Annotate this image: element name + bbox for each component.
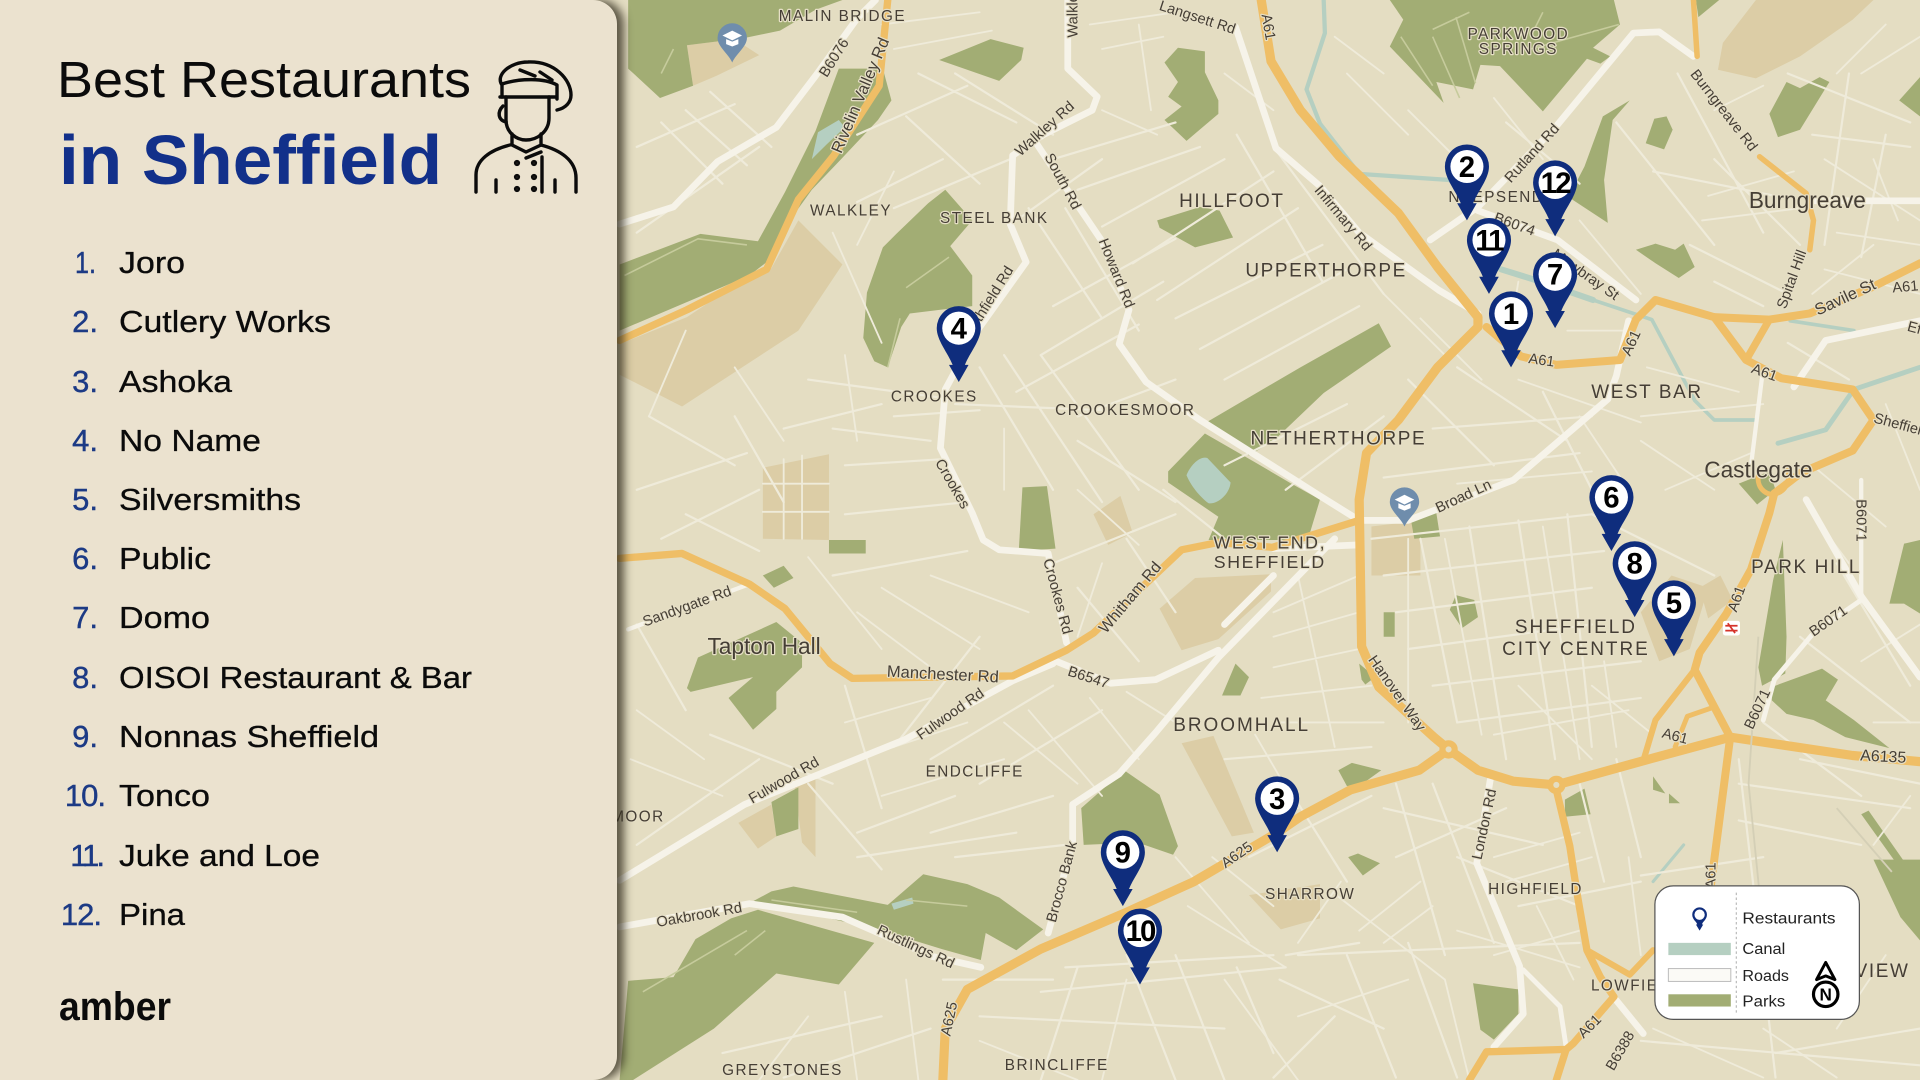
restaurant list: 2. bbox=[72, 304, 98, 339]
restaurant list: No Name bbox=[119, 423, 261, 458]
road labels: Broad Ln bbox=[1433, 477, 1494, 517]
pin 3: 3 bbox=[1269, 783, 1285, 816]
road labels: Walkley Rd bbox=[1012, 99, 1078, 160]
icon: north compass: N bbox=[1820, 984, 1832, 1004]
area labels: MALIN BRIDGE bbox=[779, 8, 906, 25]
major white roads bbox=[620, 0, 1920, 1047]
parks bbox=[620, 0, 1920, 1080]
title bbox=[57, 51, 471, 199]
area labels: SHEFFIELD bbox=[1515, 617, 1637, 638]
road labels: A61 bbox=[1749, 361, 1779, 385]
pin 2 bbox=[1445, 144, 1489, 220]
pin 11 bbox=[1467, 218, 1511, 294]
pin 2: 2 bbox=[1459, 151, 1475, 184]
pin 6: 6 bbox=[1603, 482, 1620, 515]
pin 5 bbox=[1652, 580, 1696, 656]
area labels: HILLFOOT bbox=[1179, 191, 1285, 212]
area labels: Tapton Hall bbox=[707, 633, 821, 659]
road labels: Sandygate Rd bbox=[641, 584, 734, 630]
pin 9 bbox=[1101, 830, 1145, 906]
pin 8: 8 bbox=[1627, 548, 1643, 581]
road labels: A625 bbox=[1219, 839, 1256, 872]
restaurant list: 3. bbox=[72, 364, 98, 399]
restaurant list: Silversmiths bbox=[119, 482, 301, 517]
restaurant list: 10. bbox=[65, 778, 105, 813]
restaurant list: OISOI Restaurant & Bar bbox=[119, 660, 472, 695]
restaurant list: Joro bbox=[119, 245, 185, 280]
road labels: Northfield Rd bbox=[958, 264, 1017, 345]
icon: chef bbox=[476, 62, 576, 192]
road labels: Rutland Rd bbox=[1502, 121, 1563, 186]
legend: restaurants marker: Restaurants bbox=[1742, 910, 1836, 927]
brand: amber: amber bbox=[59, 985, 171, 1029]
road labels: Burngreave Rd bbox=[1687, 67, 1760, 155]
restaurant list: 4. bbox=[72, 423, 98, 458]
legend: canal bbox=[1668, 941, 1785, 958]
icon: railway station bbox=[1723, 621, 1740, 636]
restaurant list: Nonnas Sheffield bbox=[119, 719, 379, 754]
area labels: PARK HILL bbox=[1751, 557, 1861, 578]
legend: roads: Roads bbox=[1742, 968, 1789, 985]
tan land areas bbox=[620, 0, 1873, 929]
road labels: B6071 bbox=[1742, 687, 1774, 732]
area labels: CROOKESMOOR bbox=[1055, 402, 1195, 419]
canal and water bbox=[812, 0, 1920, 910]
icon: north compass bbox=[1813, 962, 1838, 1007]
road labels: B6388 bbox=[1603, 1029, 1638, 1073]
road labels: Howard Rd bbox=[1095, 236, 1137, 310]
legend: roads bbox=[1668, 968, 1789, 985]
road labels: B6074 bbox=[1492, 210, 1537, 240]
restaurant list: Ashoka bbox=[119, 364, 233, 399]
railway bbox=[1749, 637, 1892, 931]
area labels: SHEFFIELD bbox=[1214, 552, 1326, 572]
legend: parks: Parks bbox=[1742, 994, 1785, 1011]
road labels: Spital Hill bbox=[1774, 248, 1810, 311]
area labels: WEST BAR bbox=[1591, 382, 1703, 403]
pin 12: 12 bbox=[1541, 167, 1571, 200]
area labels: WALKLEY bbox=[810, 203, 892, 220]
road labels: A6135 bbox=[1860, 747, 1907, 767]
road labels: A61 bbox=[1619, 328, 1645, 358]
restaurant list: 1. bbox=[75, 245, 96, 280]
road labels: Fulwood Rd bbox=[746, 754, 822, 807]
road labels: A61 bbox=[1704, 862, 1720, 889]
restaurant list: Domo bbox=[119, 600, 210, 635]
restaurant list: 8. bbox=[72, 660, 98, 695]
road labels: A61 bbox=[1892, 278, 1919, 297]
road labels: Oakbrook Rd bbox=[655, 900, 743, 931]
road labels bbox=[641, 0, 1920, 1073]
area labels: HIGHFIELD bbox=[1488, 881, 1583, 898]
restaurant list: 11. bbox=[70, 838, 102, 873]
road labels: A625 bbox=[938, 1001, 961, 1037]
area labels: GREYSTONES bbox=[722, 1062, 843, 1079]
title: Best Restaurants bbox=[57, 51, 471, 108]
restaurant list: Juke and Loe bbox=[119, 838, 320, 873]
pin 6 bbox=[1589, 475, 1633, 551]
road labels: A61 bbox=[1575, 1012, 1605, 1042]
road labels: Manchester Rd bbox=[886, 662, 999, 687]
road labels: Rustlings Rd bbox=[874, 922, 957, 972]
road labels: Savile St bbox=[1811, 274, 1879, 319]
panel: restaurant list bbox=[0, 0, 617, 1080]
restaurant list: Tonco bbox=[119, 778, 210, 813]
minor streets bbox=[631, 12, 1920, 1080]
restaurant list: 5. bbox=[72, 482, 98, 517]
pin 4 bbox=[937, 306, 981, 382]
area labels: NETHERTHORPE bbox=[1250, 428, 1426, 449]
pin 10 bbox=[1118, 909, 1162, 984]
pin 7: 7 bbox=[1547, 259, 1563, 292]
restaurant list: Public bbox=[119, 541, 211, 576]
area labels: BROOMHALL bbox=[1173, 715, 1310, 736]
area labels bbox=[611, 8, 1909, 1079]
road labels: Hanover Way bbox=[1364, 653, 1429, 735]
road labels: B6071 bbox=[1807, 603, 1851, 640]
pin 5: 5 bbox=[1666, 587, 1682, 620]
restaurant list: Cutlery Works bbox=[119, 304, 331, 339]
legend: canal: Canal bbox=[1742, 941, 1785, 958]
area labels: SHARROW bbox=[1265, 886, 1355, 903]
motorways and A roads bbox=[620, 0, 1920, 1080]
road labels: Whitham Rd bbox=[1096, 559, 1165, 637]
area labels: STEEL BANK bbox=[940, 210, 1049, 227]
legend bbox=[1655, 886, 1859, 1019]
pin 11: 11 bbox=[1475, 224, 1504, 257]
legend: parks bbox=[1668, 994, 1785, 1011]
road labels: A61 bbox=[1725, 584, 1749, 614]
restaurant list: 12. bbox=[61, 897, 101, 932]
road labels: London Rd bbox=[1470, 787, 1500, 861]
pin 1: 1 bbox=[1503, 298, 1519, 331]
pin 8 bbox=[1613, 541, 1657, 617]
area labels: MOOR bbox=[611, 809, 665, 826]
area labels: NEEPSEND bbox=[1448, 189, 1544, 206]
road labels: A61 bbox=[1660, 726, 1690, 748]
area labels: LOWFIELD bbox=[1591, 978, 1681, 995]
area labels: Burngreave bbox=[1749, 187, 1866, 213]
road labels: B6547 bbox=[1066, 664, 1111, 692]
area labels: PARKWOOD bbox=[1468, 26, 1569, 43]
pin 12 bbox=[1533, 160, 1577, 236]
area labels: CITY CENTRE bbox=[1502, 639, 1650, 660]
road labels: B6076 bbox=[817, 36, 853, 80]
road labels: A61 bbox=[1258, 13, 1278, 41]
icon: university marker Malin Bridge bbox=[718, 23, 747, 62]
park paths bbox=[624, 12, 1619, 992]
area labels: UPPERTHORPE bbox=[1245, 261, 1407, 282]
legend: restaurants marker bbox=[1692, 907, 1836, 931]
restaurant list: 6. bbox=[72, 541, 98, 576]
roundabouts bbox=[1442, 743, 1562, 791]
pin 9: 9 bbox=[1115, 837, 1131, 870]
area labels: WEST END, bbox=[1213, 533, 1326, 553]
road labels: B6071 bbox=[1852, 499, 1868, 542]
road labels: Mowbray St bbox=[1549, 246, 1622, 304]
title: in Sheffield bbox=[59, 121, 442, 199]
pin 3 bbox=[1255, 776, 1299, 852]
restaurant list: 7. bbox=[72, 600, 98, 635]
restaurant list: Pina bbox=[119, 897, 186, 932]
road labels: Fulwood Rd bbox=[914, 686, 987, 744]
pin 1 bbox=[1489, 291, 1533, 367]
area labels: CROOKES bbox=[891, 389, 978, 406]
area labels: SPRINGS bbox=[1479, 41, 1558, 58]
road labels: Crookes Rd bbox=[1039, 557, 1075, 636]
area labels: BRINCLIFFE bbox=[1005, 1057, 1109, 1074]
road labels: Infirmary Rd bbox=[1311, 183, 1374, 254]
road labels: Rivelin Valley Rd bbox=[827, 35, 893, 156]
road labels: Crookes bbox=[931, 456, 972, 512]
restaurant list bbox=[61, 245, 472, 932]
pin 10: 10 bbox=[1125, 915, 1156, 948]
road labels: South Rd bbox=[1041, 151, 1084, 212]
road labels: Brocco Bank bbox=[1044, 839, 1081, 924]
pin 7 bbox=[1533, 252, 1577, 328]
pin 4: 4 bbox=[951, 313, 968, 346]
road labels: A61 bbox=[1527, 351, 1556, 371]
area labels: Castlegate bbox=[1704, 457, 1812, 483]
area labels: ENDCLIFFE bbox=[926, 763, 1024, 780]
icon: university marker Broad Lane bbox=[1390, 487, 1419, 527]
restaurant list: 9. bbox=[72, 719, 98, 754]
area labels: VIEW bbox=[1855, 961, 1909, 982]
